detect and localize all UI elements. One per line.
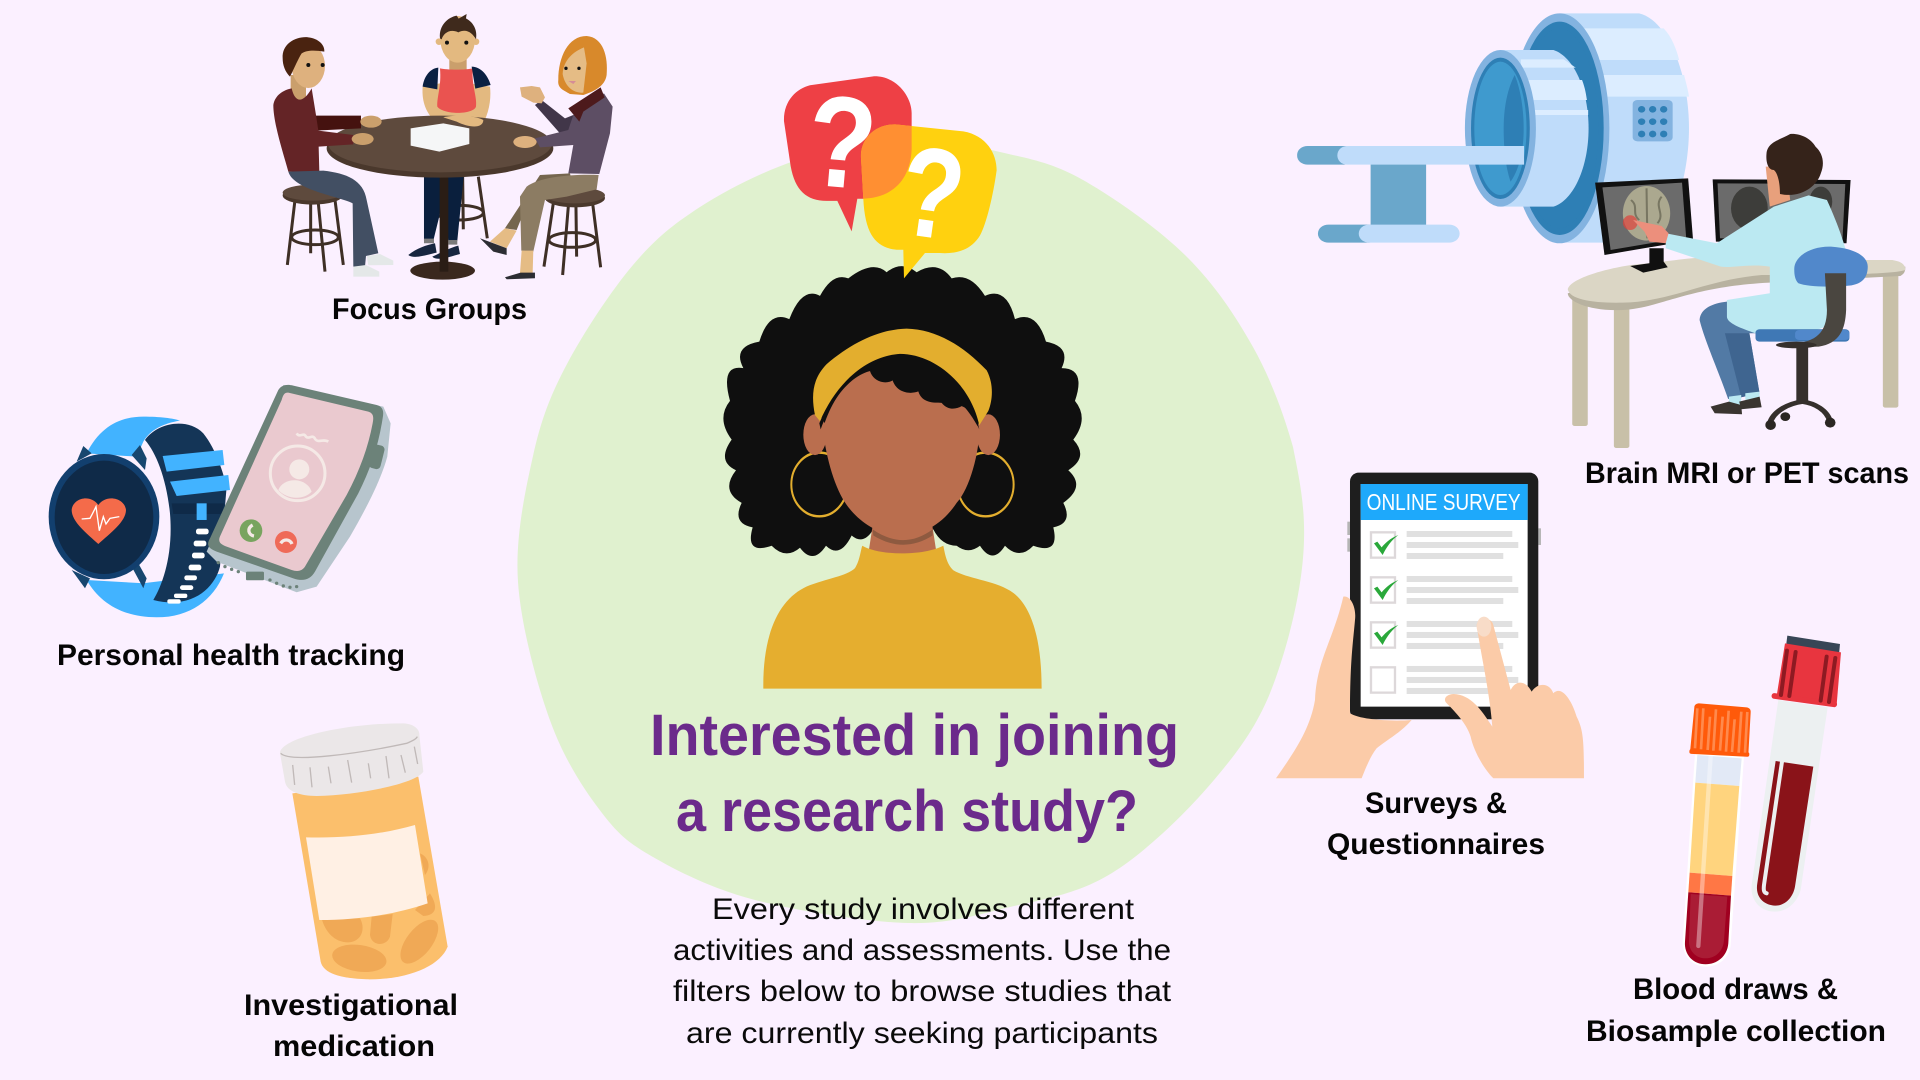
heart xyxy=(72,498,126,544)
hand pointing xyxy=(1633,220,1669,243)
hair xyxy=(723,266,1082,556)
left man xyxy=(291,75,306,101)
label: surveys and questionnaires xyxy=(1327,787,1545,861)
desk legs xyxy=(1572,272,1898,448)
chair xyxy=(1794,247,1868,287)
title: a research study? xyxy=(676,779,1138,844)
inner cylinder xyxy=(1500,50,1589,207)
face xyxy=(823,368,979,536)
neck xyxy=(868,521,937,554)
icon: blood sample tubes xyxy=(1683,636,1841,967)
title: Interested in joining xyxy=(650,703,1179,768)
fringe xyxy=(819,354,979,429)
label: investigational medication xyxy=(244,989,458,1063)
icon: question speech bubbles: ? xyxy=(891,118,973,269)
text block: description: activities and assessments. Use the xyxy=(673,934,1171,967)
survey header xyxy=(1361,484,1528,520)
table base xyxy=(410,262,475,280)
doctor coat xyxy=(1666,195,1845,334)
table xyxy=(1371,163,1426,227)
text block: description: are currently seeking participants xyxy=(686,1017,1158,1050)
call buttons xyxy=(240,519,262,542)
doctor head xyxy=(1766,167,1790,207)
label: focus groups: Focus Groups xyxy=(332,293,527,326)
icon: question speech bubbles: ? xyxy=(802,67,882,218)
text block: description xyxy=(673,893,1172,1050)
label: personal health tracking: Personal health tracking xyxy=(57,639,405,672)
icon: smartwatch and phone xyxy=(49,385,391,617)
center man body xyxy=(449,57,467,75)
icon: tablet with online survey xyxy=(1276,473,1584,778)
panel: central green blob xyxy=(517,140,1304,923)
text block: description: filters below to browse studies that xyxy=(673,975,1172,1008)
shirt xyxy=(763,546,1042,689)
icon: medication bottle xyxy=(280,723,448,979)
watch case xyxy=(49,454,159,579)
monitor 2 xyxy=(1713,179,1851,243)
box xyxy=(411,123,469,152)
earrings xyxy=(791,453,1014,516)
scanner ring xyxy=(1510,13,1609,243)
stools xyxy=(287,177,601,275)
icon: woman with afro, faceless portrait xyxy=(723,266,1082,689)
hands xyxy=(1276,596,1412,778)
icon: focus group around table xyxy=(273,14,613,280)
checkboxes xyxy=(1371,532,1395,693)
icon: tablet with online survey: ONLINE SURVEY xyxy=(1367,489,1521,515)
label: blood draws and biosample collection: Biosample collection xyxy=(1586,1015,1886,1048)
survey rows xyxy=(1407,531,1518,694)
monitor 1 xyxy=(1630,248,1668,273)
control panel xyxy=(1633,100,1673,141)
doctor trousers xyxy=(1700,295,1772,399)
label: brain MRI or PET scans: Brain MRI or PET scans xyxy=(1585,457,1909,490)
label: blood draws and biosample collection: Blood draws & xyxy=(1633,973,1838,1006)
brain 1 xyxy=(1623,186,1670,241)
label: surveys and questionnaires: Surveys & xyxy=(1365,787,1507,820)
text block: description: Every study involves different xyxy=(712,893,1135,926)
icon: MRI scanner and doctor at desk xyxy=(1297,13,1905,448)
label: blood draws and biosample collection xyxy=(1586,973,1886,1048)
right woman xyxy=(558,36,607,95)
tube 1 xyxy=(1683,753,1744,967)
label: investigational medication: medication xyxy=(273,1030,435,1063)
ears xyxy=(803,414,1000,455)
scanner outer body xyxy=(1560,13,1689,243)
phone avatar xyxy=(270,446,325,501)
tube 2 xyxy=(1751,700,1828,912)
phone xyxy=(207,385,391,592)
watch lugs xyxy=(72,445,147,588)
title xyxy=(650,703,1179,844)
label: investigational medication: Investigational xyxy=(244,989,458,1022)
headband xyxy=(813,329,992,425)
center man legs xyxy=(424,173,464,241)
desk top xyxy=(1568,267,1905,310)
icon: question speech bubbles xyxy=(784,67,997,278)
watch strap xyxy=(87,417,180,457)
label: surveys and questionnaires: Questionnaires xyxy=(1327,828,1545,861)
table xyxy=(327,119,553,178)
